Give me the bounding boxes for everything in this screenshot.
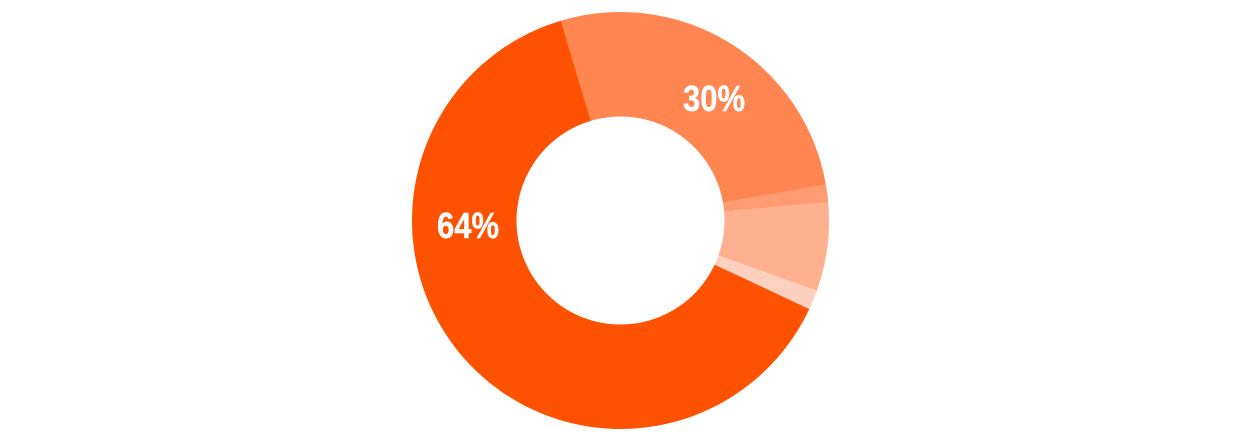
label: 64%: 64% — [437, 205, 499, 246]
slice: light orange — [718, 202, 829, 291]
donut chart — [412, 12, 829, 429]
slice: 64% — [412, 21, 809, 429]
label: 30%: 30% — [683, 78, 745, 119]
slice: palest orange — [715, 256, 817, 309]
slice: small medium-orange — [723, 185, 828, 211]
slice: 30% — [561, 12, 826, 203]
